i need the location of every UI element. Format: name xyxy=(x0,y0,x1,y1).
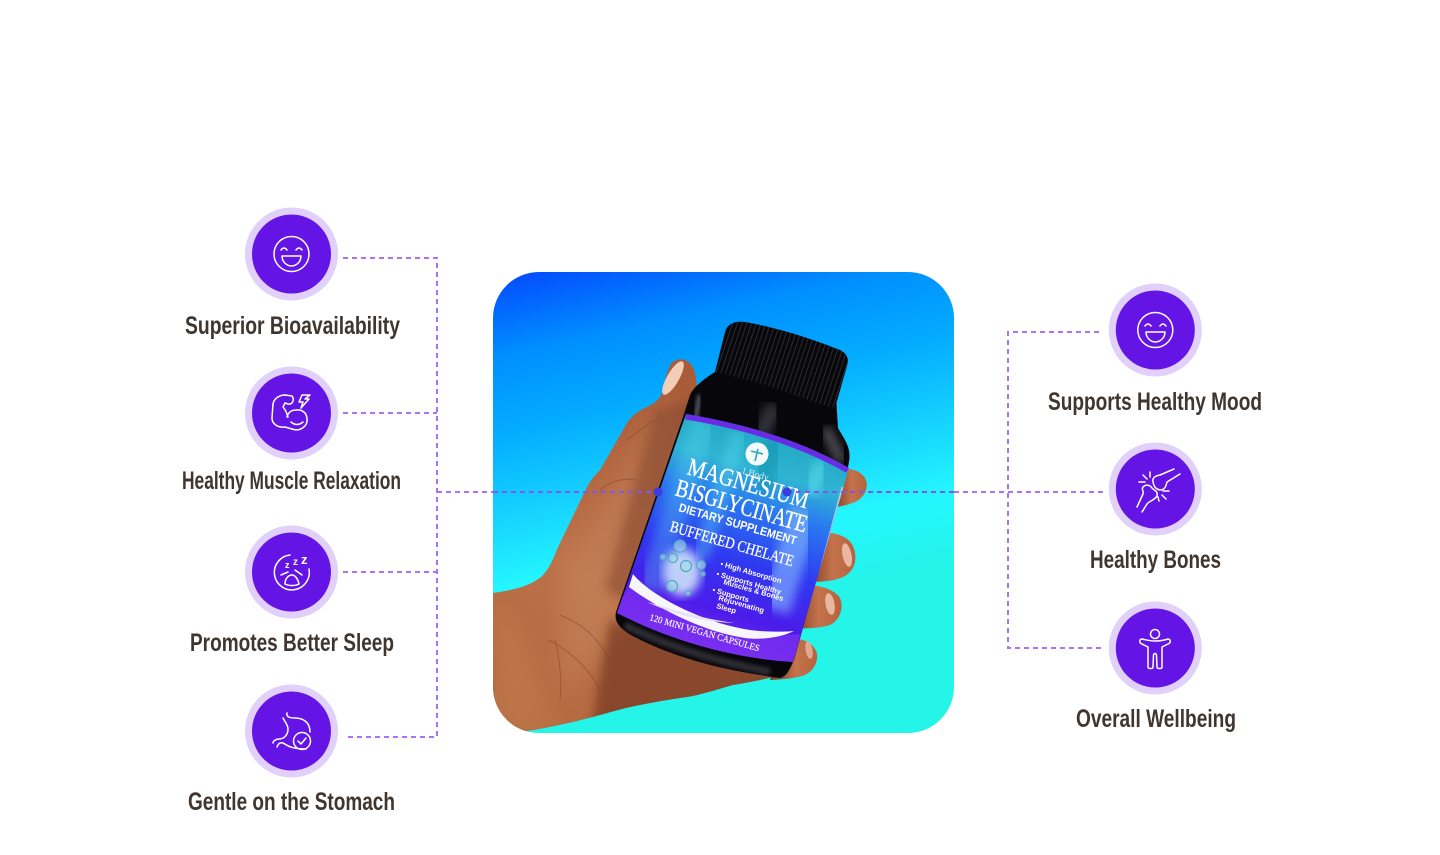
benefit: Supports Healthy Mood xyxy=(1048,284,1262,416)
label text: • Supports xyxy=(711,585,750,604)
panel: product photo xyxy=(470,272,954,750)
label: Healthy Muscle Relaxation xyxy=(182,467,401,495)
finger: middle xyxy=(816,533,856,582)
label: Promotes Better Sleep xyxy=(190,629,394,657)
label text: • High Absorption xyxy=(719,559,783,585)
benefit: Superior Bioavailability xyxy=(185,208,400,340)
label text: DIETARY SUPPLEMENT xyxy=(677,500,799,548)
label text xyxy=(648,454,812,654)
icon: person xyxy=(1109,602,1202,694)
icon: sleeping face: z xyxy=(285,560,290,570)
benefit: Overall Wellbeing xyxy=(1076,602,1236,733)
logo: 1 Body xyxy=(740,466,770,484)
hand shading xyxy=(496,401,771,731)
icon: smiling face xyxy=(1109,284,1202,376)
icon: smiling face xyxy=(245,208,338,300)
icon: sleeping face: z xyxy=(293,557,298,568)
logo xyxy=(742,442,769,482)
finger: little xyxy=(770,638,817,680)
connector lines: right xyxy=(1008,332,1103,648)
finger: ring xyxy=(802,586,842,628)
label text: BISGLYCINATE xyxy=(672,475,811,538)
connector lines: left xyxy=(343,258,437,737)
icon: flexed muscle xyxy=(245,366,338,460)
label xyxy=(617,414,849,662)
connector line: to product from left xyxy=(437,488,662,496)
swoosh xyxy=(629,574,794,639)
icon: hand holding bottle xyxy=(493,359,867,732)
label text: • Supports Healthy xyxy=(715,569,783,597)
icon: joint bones xyxy=(1109,442,1202,536)
connector line: to product from right xyxy=(782,488,1008,496)
benefit: Promotes Better Sleep xyxy=(190,526,394,657)
label text: BUFFERED CHELATE xyxy=(668,519,796,570)
icon: stomach with check xyxy=(245,684,338,778)
benefit: Healthy Muscle Relaxation xyxy=(182,366,401,495)
label text: Rejuvenating xyxy=(717,593,766,615)
label text: Muscles & Bones xyxy=(722,577,785,603)
label: Healthy Bones xyxy=(1090,546,1221,574)
label text: 120 MINI VEGAN CAPSULES xyxy=(648,613,761,654)
icon: supplement bottle xyxy=(616,322,850,678)
benefit: Gentle on the Stomach xyxy=(188,684,395,816)
label: Overall Wellbeing xyxy=(1076,705,1236,733)
label: Superior Bioavailability xyxy=(185,312,400,340)
label: Gentle on the Stomach xyxy=(188,788,395,816)
bottle body xyxy=(616,362,850,678)
benefit: Healthy Bones xyxy=(1090,442,1221,574)
panel background gradient xyxy=(493,272,954,733)
molecule graphic xyxy=(660,540,706,596)
label text: MAGNESIUM xyxy=(684,454,812,514)
icon: sleeping face xyxy=(245,526,338,618)
icon: sleeping face: z xyxy=(301,552,308,567)
bottle cap xyxy=(715,322,848,408)
label: Supports Healthy Mood xyxy=(1048,388,1262,416)
finger: index xyxy=(838,468,867,507)
label text: Sleep xyxy=(715,601,738,616)
thumb nail xyxy=(662,361,684,395)
